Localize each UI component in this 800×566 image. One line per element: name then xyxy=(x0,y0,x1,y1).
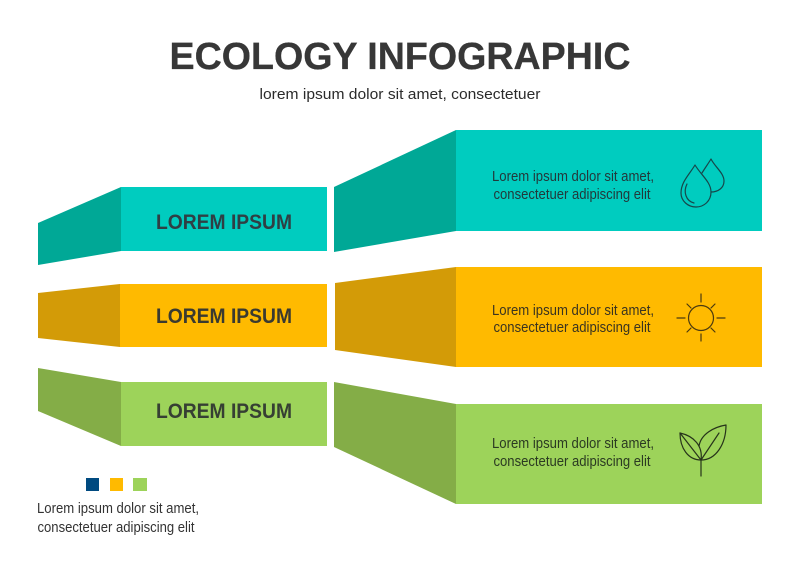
legend text: consectetuer adipiscing elit xyxy=(38,519,195,536)
panel: left green block: LOREM IPSUM xyxy=(156,399,292,423)
panel: right teal block xyxy=(334,130,762,252)
legend text xyxy=(37,500,199,536)
legend text: Lorem ipsum dolor sit amet, xyxy=(37,500,199,517)
icon: leaf sprout xyxy=(680,425,726,476)
panel: left teal block: LOREM IPSUM xyxy=(156,210,292,234)
panel: left teal block xyxy=(38,187,327,265)
panel: right green block: Lorem ipsum dolor sit amet, xyxy=(492,435,654,452)
legend xyxy=(37,478,199,536)
panel: right green block: consectetuer adipiscing elit xyxy=(494,453,651,470)
panel: left yellow block: LOREM IPSUM xyxy=(156,304,292,328)
legend swatch: yellow xyxy=(110,478,123,491)
panel: right teal block: consectetuer adipiscing elit xyxy=(494,186,651,203)
panel: left yellow block xyxy=(38,284,327,347)
panel: right yellow block: Lorem ipsum dolor sit amet, xyxy=(492,302,654,319)
subtitle: lorem ipsum dolor sit amet, consectetuer xyxy=(260,86,540,103)
panel: left green block xyxy=(38,368,327,446)
legend swatch: blue xyxy=(86,478,99,491)
panel: right yellow block xyxy=(335,267,762,367)
legend swatch: green xyxy=(133,478,147,491)
panel: right green block xyxy=(334,382,762,504)
title: ECOLOGY INFOGRAPHIC xyxy=(170,36,630,78)
icon: sun xyxy=(677,294,725,341)
icon: water drops xyxy=(681,159,724,207)
panel: right teal block: Lorem ipsum dolor sit amet, xyxy=(492,168,654,185)
panel: right yellow block: consectetuer adipiscing elit xyxy=(494,319,651,336)
